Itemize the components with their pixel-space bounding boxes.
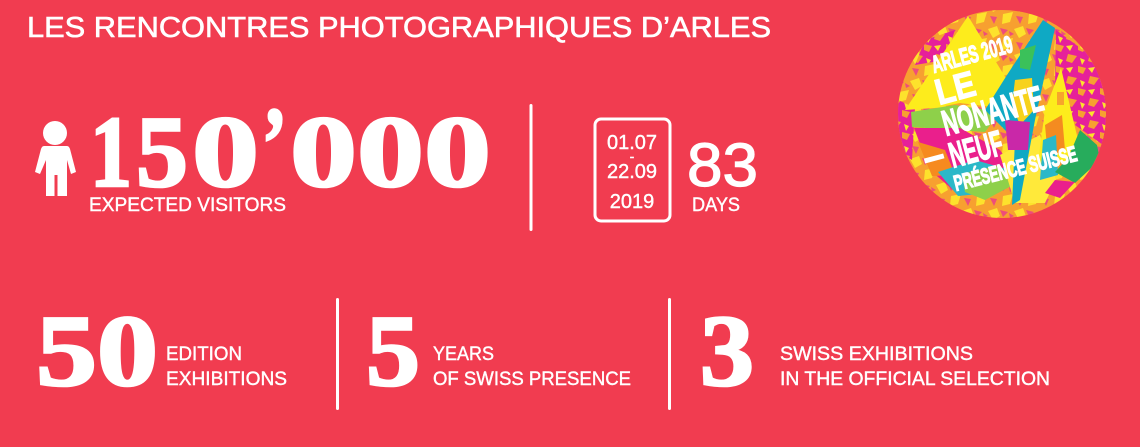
stat: 5 years of Swiss presence: OF SWISS PRESENCE bbox=[433, 369, 631, 390]
badge text: ARLES 2019 bbox=[929, 31, 1016, 79]
stat: 3 Swiss exhibitions: IN THE OFFICIAL SELECTION bbox=[780, 369, 1050, 390]
date box: 22.09 bbox=[607, 161, 657, 183]
stat: 50 edition exhibitions: EDITION bbox=[166, 344, 242, 365]
visitors count: 0 bbox=[424, 96, 491, 209]
date box: 01.07 bbox=[607, 132, 657, 154]
visitors count: 0 bbox=[290, 96, 357, 209]
stat: 50 edition exhibitions bbox=[36, 295, 287, 408]
visitors label: EXPECTED VISITORS bbox=[89, 195, 286, 216]
visitors count: 0 bbox=[192, 96, 259, 209]
badge text bbox=[924, 31, 1079, 196]
stat: 50 edition exhibitions: 50 bbox=[36, 295, 158, 408]
stat: 5 years of Swiss presence: YEARS bbox=[433, 344, 494, 365]
badge: Arles 2019 Le Nonante-Neuf bbox=[898, 10, 1110, 218]
stat: 5 years of Swiss presence bbox=[366, 295, 631, 408]
cyan blade bbox=[985, 20, 1055, 205]
visitors count: ’ bbox=[262, 87, 287, 200]
badge text: LE bbox=[930, 63, 980, 113]
yellow spike bbox=[1038, 68, 1078, 162]
visitors count bbox=[90, 87, 491, 209]
badge text: NONANTE bbox=[937, 77, 1048, 144]
stat: 3 Swiss exhibitions bbox=[700, 295, 1050, 408]
days count: 83 bbox=[687, 131, 758, 199]
stat: 3 Swiss exhibitions: SWISS EXHIBITIONS bbox=[780, 344, 973, 365]
days label: DAYS bbox=[692, 195, 740, 216]
badge text: NEUF bbox=[944, 122, 1007, 176]
visitors count: 1 bbox=[90, 96, 132, 209]
yellow shape bbox=[905, 16, 1007, 110]
icon: person bbox=[35, 121, 76, 196]
title: LES RENCONTRES PHOTOGRAPHIQUES D’ARLES bbox=[27, 12, 771, 44]
visitors count: 0 bbox=[357, 96, 424, 209]
visitors count: 5 bbox=[136, 96, 188, 209]
date box bbox=[595, 119, 670, 221]
stat: 3 Swiss exhibitions: 3 bbox=[700, 295, 754, 408]
date box: - bbox=[630, 148, 635, 164]
date box: 2019 bbox=[610, 191, 654, 213]
stat: 50 edition exhibitions: EXHIBITIONS bbox=[166, 369, 287, 390]
stat: 5 years of Swiss presence: 5 bbox=[366, 295, 420, 408]
green shape bbox=[1055, 130, 1100, 183]
